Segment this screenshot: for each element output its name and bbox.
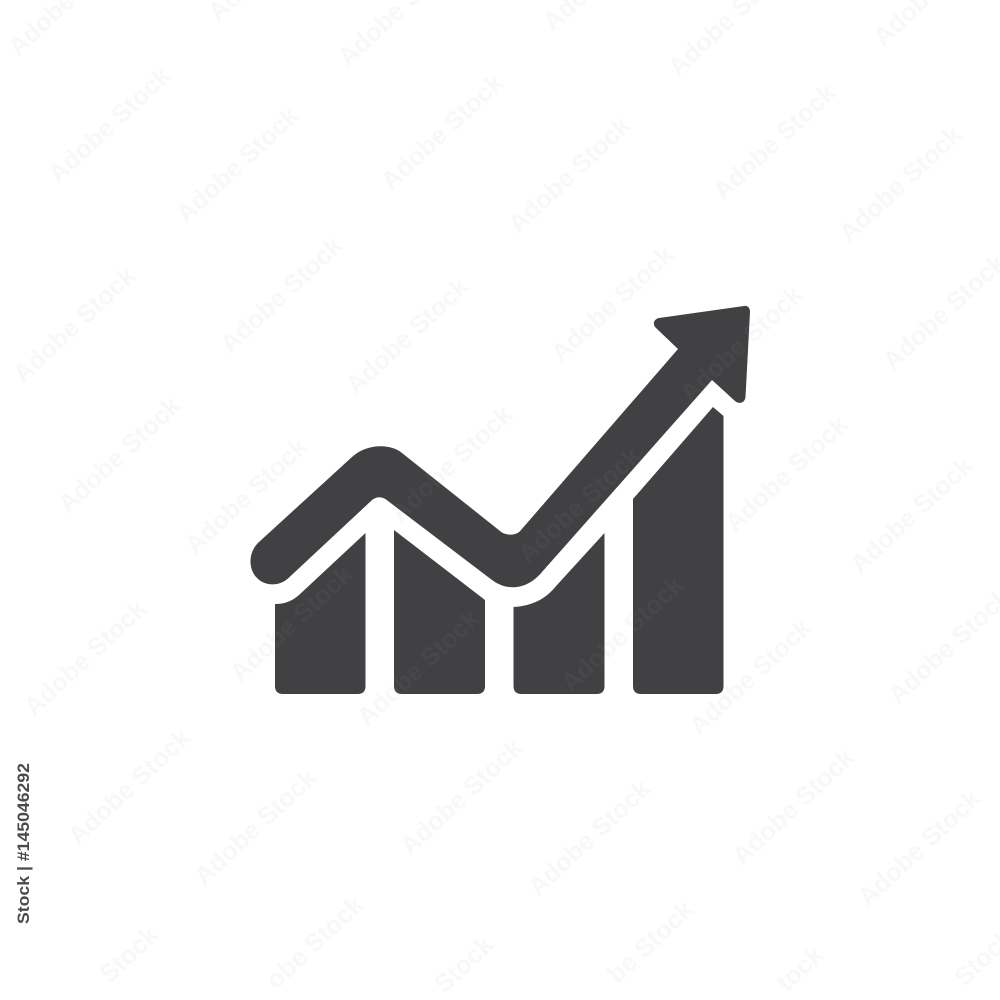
infographic canvas — [17, 306, 750, 924]
watermark pattern: Adobe Stock: Adobe Stock — [385, 400, 519, 528]
watermark pattern: Adobe Stock: Adobe Stock — [675, 280, 809, 408]
watermark pattern: Adobe Stock: Adobe Stock — [171, 101, 305, 229]
watermark pattern: Adobe Stock: Adobe Stock — [513, 441, 647, 569]
watermark pattern: Adobe Stock: Adobe Stock — [708, 78, 842, 206]
watermark pattern: Adobe Stock: tock — [772, 940, 830, 997]
watermark pattern: Adobe Stock: Adobe Stock — [53, 391, 187, 519]
watermark pattern: Adobe Stock: Adobe Stock — [727, 743, 861, 871]
watermark pattern: Adobe Stock: Adobe Stock — [180, 432, 314, 560]
watermark pattern: Adobe Stock: Adobe Stock — [189, 763, 323, 891]
bar 2 — [394, 530, 485, 694]
watermark pattern: Adobe Stock: Adobe Stock — [845, 451, 979, 579]
stock id caption: Stock | #145046292 — [14, 763, 33, 924]
watermark pattern: Adobe Stock: Adobe Stock — [523, 774, 657, 902]
bar 4 — [633, 407, 724, 694]
watermark pattern: Adobe Stock: Adobe Stock — [853, 784, 987, 912]
bar 3 — [514, 533, 604, 694]
watermark pattern: Adobe Stock: Adobe Stock — [19, 594, 153, 722]
watermark pattern: Adobe Stock: Adobe Stock — [684, 613, 818, 741]
watermark pattern: Adobe Stock: Adobe Stock — [8, 261, 142, 389]
watermark pattern: Adobe Stock: be Stock — [602, 895, 700, 989]
bar 1 — [275, 533, 366, 694]
watermark pattern: Adobe Stock: Adobe Stock — [43, 61, 177, 189]
watermark pattern: Adobe Stock: Adobe Stock — [63, 723, 197, 851]
watermark pattern: Adobe Stock: Adobe Stock — [546, 240, 680, 368]
watermark pattern: Adobe Stock: Adobe Stock — [556, 570, 690, 698]
watermark pattern: Adobe Stock: Adobe Stock — [503, 111, 637, 239]
watermark pattern: Adobe Stock: Adobe Stock — [376, 68, 510, 196]
icon: rising bar chart with arrow — [250, 306, 750, 694]
watermark pattern: Adobe Stock: Adobe Stock — [215, 231, 349, 359]
watermark pattern: Adobe Stock: Adobe Stock — [720, 410, 854, 538]
watermark pattern: Adobe Stock: Adobe Stock — [834, 120, 968, 248]
watermark pattern: Adobe Stock: Adobe Stock — [352, 604, 486, 732]
watermark pattern: Adobe Stock: Adobe Stock — [341, 272, 475, 400]
watermark pattern: Adobe Stock: Adobe Stock — [225, 560, 359, 688]
watermark pattern: Adobe Stock: Adobe Stock — [395, 733, 529, 861]
watermark pattern: Adobe Stock: obe Stock — [261, 890, 370, 995]
watermark pattern: Adobe Stock: Stock — [94, 920, 165, 989]
arrow: trend line — [250, 306, 750, 587]
watermark pattern: Adobe Stock: Stock — [429, 930, 500, 999]
